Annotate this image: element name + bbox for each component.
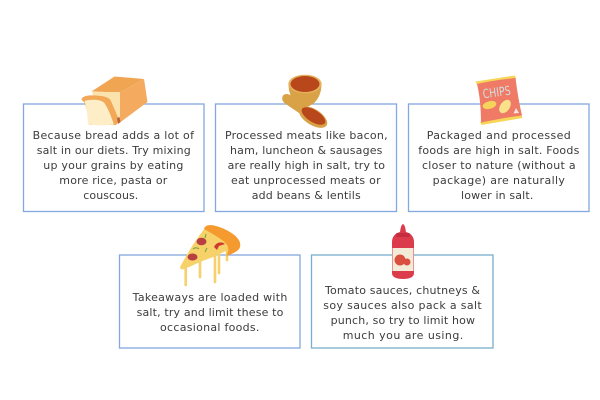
panel: processed meats	[216, 75, 396, 212]
text: packaged foods advice: lower in salt.	[461, 189, 533, 202]
panel: bread	[24, 76, 204, 212]
text: processed meats advice: are really high in salt, try to	[228, 159, 385, 172]
text: sauces advice: soy sauces also pack a salt	[323, 299, 482, 312]
text: packaged foods advice: closer to nature (without a	[422, 159, 576, 172]
text: sauces advice: Tomato sauces, chutneys &	[324, 284, 480, 297]
text: bread advice	[33, 129, 195, 202]
text: packaged foods advice: foods are high in salt. Foods	[418, 144, 580, 157]
text: bread advice: up your grains by eating	[43, 159, 183, 172]
text: sauces advice: much you are using.	[343, 329, 463, 342]
text: processed meats advice: add beans & lentils	[252, 189, 361, 202]
text: processed meats advice: Processed meats like bacon,	[225, 129, 388, 142]
text: takeaways advice: salt, try and limit these to	[137, 306, 284, 319]
text: packaged foods advice: Packaged and processed	[427, 129, 571, 142]
panel: packaged foods	[408, 76, 589, 212]
text: processed meats advice: eat unprocessed meats or	[231, 174, 381, 187]
text: packaged foods advice	[418, 129, 580, 202]
panel: takeaways	[120, 225, 300, 348]
text: sauces advice	[323, 284, 482, 342]
text: takeaways advice: occasional foods.	[160, 321, 259, 334]
panel: sauces	[312, 224, 493, 348]
text: takeaways advice	[132, 291, 287, 334]
icon: chips packet	[476, 76, 522, 125]
icon: bowl and scoop	[282, 75, 331, 132]
text: processed meats advice: ham, luncheon & sausages	[230, 144, 383, 157]
text: takeaways advice: Takeaways are loaded with	[132, 291, 287, 304]
text: bread advice: more rice, pasta or	[59, 174, 168, 187]
text: bread advice: Because bread adds a lot of	[33, 129, 195, 142]
icon: pizza slice	[180, 225, 240, 285]
text: bread advice: salt in our diets. Try mixing	[37, 144, 191, 157]
icon: bread loaf	[82, 76, 148, 125]
text: packaged foods advice: package) are naturally	[433, 174, 565, 187]
text: bread advice: couscous.	[83, 189, 138, 202]
text: sauces advice: punch, so try to limit how	[331, 314, 475, 327]
icon: chips packet: CHIPS	[482, 83, 512, 101]
text: processed meats advice	[225, 129, 388, 202]
icon: tomato sauce bottle	[392, 224, 414, 279]
